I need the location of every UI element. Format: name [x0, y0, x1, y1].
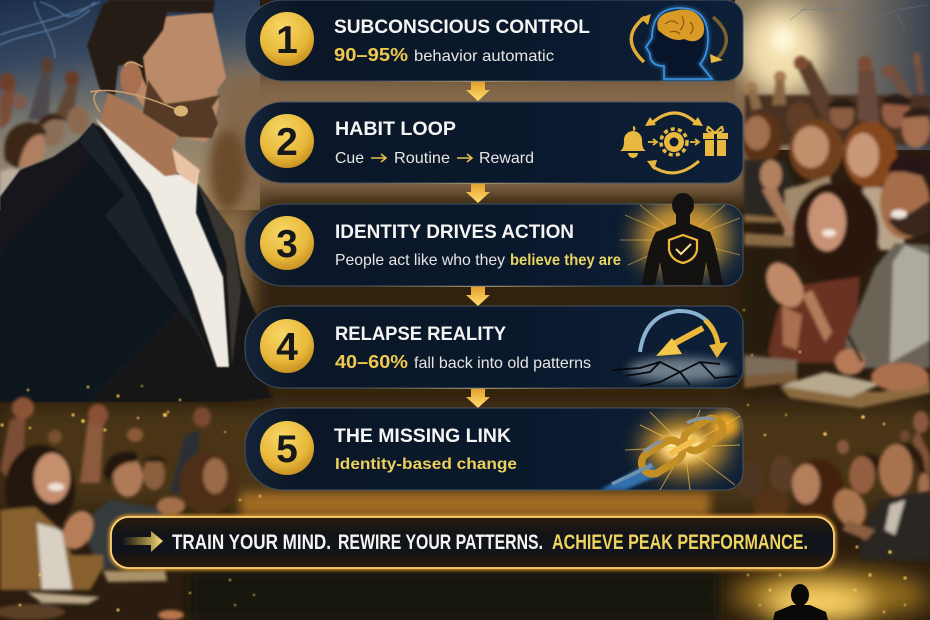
audience: lower right [736, 411, 930, 560]
presenter: jacket [0, 123, 272, 402]
text: fall back into old patterns: fall back into old patterns [414, 355, 591, 372]
presenter: neck [100, 92, 178, 178]
network lines top right [790, 2, 928, 30]
panel: step 4 relapse reality [245, 306, 743, 388]
crowd behind right of presenter [205, 130, 265, 400]
faces [0, 445, 237, 590]
presenter: collar flap [172, 148, 200, 185]
text: cue routine reward: Routine [394, 150, 450, 167]
banner text: TRAIN YOUR MIND. [172, 531, 331, 554]
icon: glowing silhouette with shield [620, 193, 740, 285]
presenter: headset [90, 62, 188, 116]
banner text [172, 531, 808, 554]
flow arrow 4 to 5 [350, 387, 610, 408]
audience: top left [0, 57, 89, 198]
icon: head with brain [631, 8, 726, 79]
heading 4: RELAPSE REALITY [335, 324, 506, 345]
number badge 4: 4 [276, 326, 298, 369]
gold sparkles [0, 309, 906, 613]
desks back [744, 215, 793, 247]
text: cue routine reward: Cue [335, 150, 364, 167]
man right [846, 155, 930, 368]
heading 2: HABIT LOOP [335, 119, 456, 140]
presenter: far lapel [197, 183, 241, 366]
flow arrow 2 to 3 [350, 182, 610, 203]
banner: call to action [111, 517, 834, 568]
icon: banner arrow [122, 531, 163, 552]
number badge 1 [260, 12, 314, 66]
heading 3: IDENTITY DRIVES ACTION [335, 222, 574, 243]
rear faces [786, 94, 930, 148]
icon: habit loop [620, 113, 728, 173]
raised arms [745, 52, 925, 125]
woman middle [760, 119, 843, 236]
number badge 2 [260, 114, 314, 168]
icon: falling arrow and cracked ground [612, 311, 738, 386]
woman back left [742, 112, 800, 215]
woman middle right [843, 122, 905, 250]
heading 1: SUBCONSCIOUS CONTROL [334, 17, 590, 38]
presenter [0, 0, 272, 402]
presenter: face [130, 12, 226, 142]
desk front [744, 335, 930, 408]
number badge 2: 2 [276, 121, 298, 164]
raised arms [0, 397, 211, 493]
number badge 5: 5 [276, 428, 298, 471]
icon: glowing chain link [600, 410, 742, 490]
number badge 1: 1 [276, 19, 298, 62]
banner text: ACHIEVE PEAK PERFORMANCE. [552, 531, 808, 554]
banner text: REWIRE YOUR PATTERNS. [338, 531, 543, 554]
desk and paper [27, 592, 100, 604]
presenter: ear [120, 61, 142, 95]
curly woman [759, 182, 879, 363]
network lines top left [0, 2, 100, 58]
back band [745, 95, 930, 145]
number badge 3 [260, 216, 314, 270]
glow behind stage speaker [763, 584, 873, 620]
text: cue routine reward: Reward [479, 150, 534, 167]
flow arrow 1 to 2 [350, 80, 610, 101]
presenter: beard [143, 80, 220, 138]
number badge 3: 3 [276, 223, 298, 266]
panel: step 5 the missing link [245, 408, 743, 490]
audience: top right [742, 52, 930, 408]
panel: step 1 subconscious control [245, 0, 743, 81]
text: cue routine reward [335, 150, 534, 167]
stage speaker silhouette [773, 584, 828, 620]
panel: step 3 identity drives action [245, 193, 743, 286]
presenter: lapel shade [80, 123, 215, 366]
text: believe they are: believe they are [510, 252, 621, 269]
stat: 90-95%: 90–95% [334, 45, 408, 65]
text: people act like who they: People act like who they [335, 252, 505, 269]
flow arrow 3 to 4 [350, 285, 610, 306]
number badge 4 [260, 319, 314, 373]
text: identity based change: Identity-based change [335, 456, 517, 473]
audience: lower left [0, 397, 237, 620]
panel: step 2 habit loop [245, 102, 743, 183]
stat: 40-60%: 40–60% [335, 352, 408, 372]
presenter: shirt [95, 118, 229, 367]
heading 5: THE MISSING LINK [334, 426, 511, 447]
number badge 5 [260, 421, 314, 475]
text: behavior automatic: behavior automatic [414, 48, 554, 65]
presenter: hair [87, 0, 215, 95]
